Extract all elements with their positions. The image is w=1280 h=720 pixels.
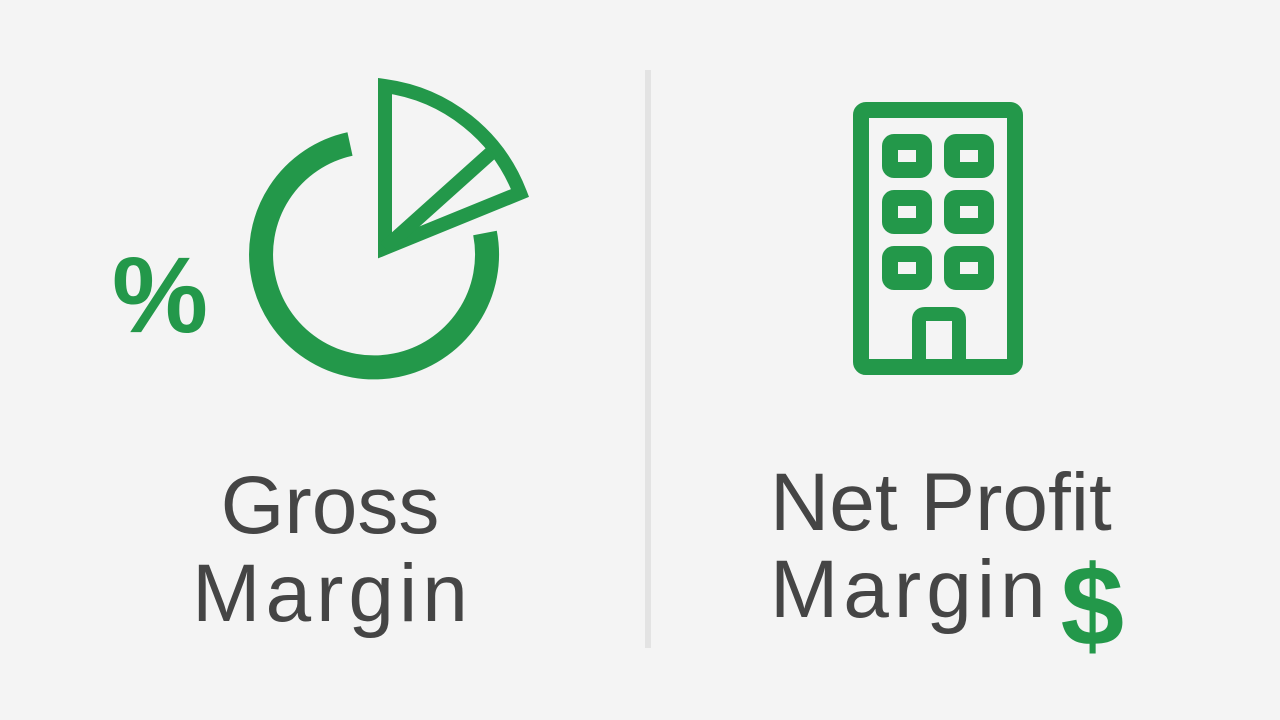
pie ring xyxy=(261,144,487,367)
icon: building xyxy=(853,102,1023,375)
pie slice xyxy=(385,86,520,248)
percent sign: % xyxy=(112,234,208,355)
text: Net Profit Margin xyxy=(770,457,1124,670)
text: Gross Margin xyxy=(192,460,473,639)
text: Net Profit Margin: Net Profit xyxy=(770,457,1112,548)
divider xyxy=(645,70,651,648)
text: Net Profit Margin: Margin$ xyxy=(770,543,1124,670)
text: Gross Margin: Gross xyxy=(221,460,439,551)
text: Gross Margin: Margin xyxy=(192,548,473,639)
icon: pie chart with percent xyxy=(112,78,529,380)
